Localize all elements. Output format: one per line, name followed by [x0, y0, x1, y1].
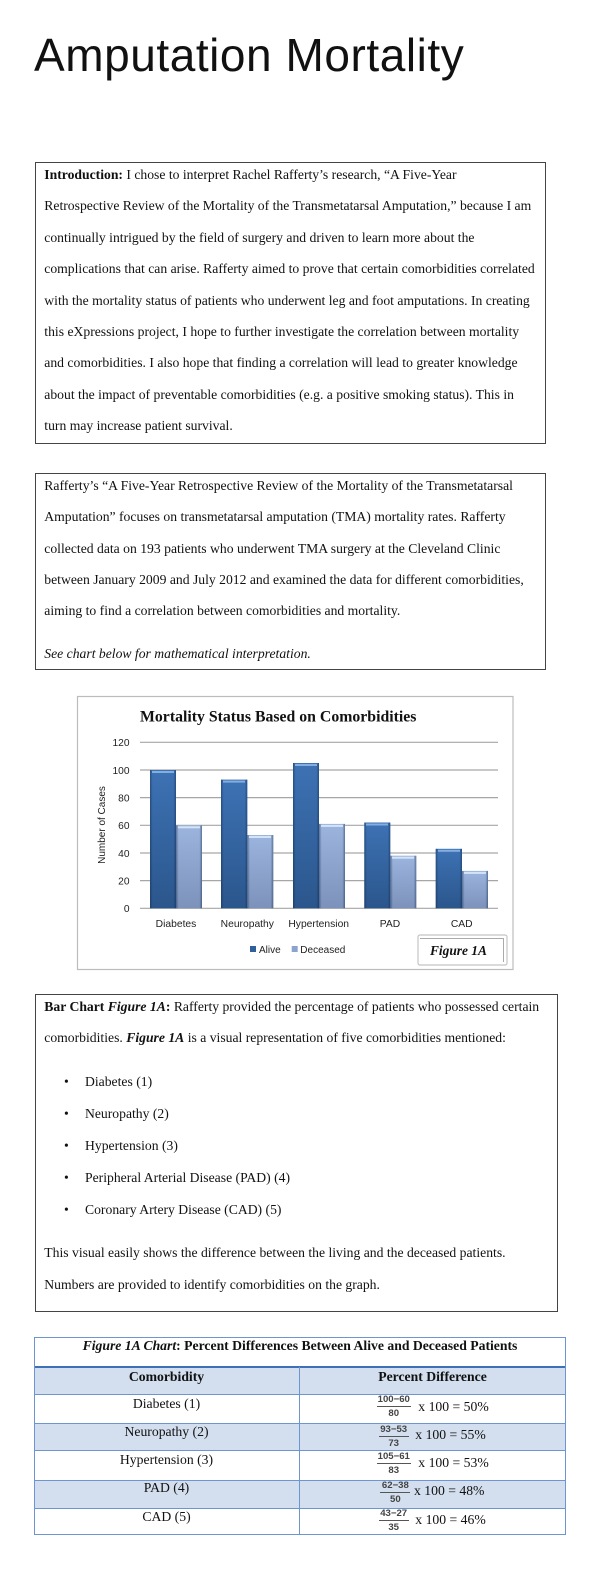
panel: study summary: between January 2009 and July 2012 and examined the data for different comorbidities,	[44, 572, 524, 587]
bar side bevels	[150, 763, 488, 908]
panel: introduction	[35, 162, 546, 444]
table: percent differences: 43−27	[380, 1508, 407, 1519]
panel: study summary	[35, 473, 546, 670]
gridlines and axis labels: 100	[112, 766, 130, 777]
gridlines and axis labels: 0	[124, 904, 130, 915]
comorbidity list: Peripheral Arterial Disease (PAD) (4)	[85, 1170, 290, 1185]
comorbidity list: •	[64, 1074, 69, 1089]
formulas: 80	[388, 1408, 399, 1418]
table: percent differences: 35	[388, 1522, 399, 1532]
panel: study summary: aiming to find a correlation between comorbidities and mortality.	[44, 603, 400, 618]
category labels: Hypertension	[288, 919, 349, 930]
y axis label: Number of Cases	[97, 786, 108, 864]
table: percent differences: 73	[388, 1438, 399, 1448]
legend: Alive	[259, 945, 281, 956]
figure label: Figure 1A	[429, 943, 487, 958]
comorbidity list: Coronary Artery Disease (CAD) (5)	[85, 1202, 281, 1217]
panel: introduction: and comorbidities. I also hope that finding a correlation will lead to greater knowledge	[44, 355, 518, 370]
category labels	[156, 919, 473, 930]
gridlines and axis labels: 80	[118, 794, 130, 804]
table: percent differences: Neuropathy (2)	[124, 1424, 208, 1439]
panel: introduction: about the impact of preventable comorbidities (e.g. a positive smoking status). This in	[44, 387, 514, 402]
category labels: PAD	[380, 919, 400, 930]
panel: introduction: turn may increase patient survival.	[44, 418, 233, 433]
comorbidity list: •	[64, 1170, 69, 1185]
gridlines and axis labels: 40	[118, 849, 130, 860]
panel: introduction: this eXpressions project, I hope to further investigate the correlation between mortality	[44, 324, 519, 339]
table: percent differences: 93−53	[380, 1424, 407, 1435]
chart title: Mortality Status Based on Comorbidities	[140, 709, 416, 726]
panel: bar chart explanation: comorbidities. Figure 1A is a visual representation of five comorbidities mentioned:	[44, 1030, 506, 1045]
comorbidity list: Neuropathy (2)	[85, 1106, 169, 1121]
table: percent differences: x 100 = 48%	[414, 1483, 484, 1498]
category labels: Neuropathy	[221, 919, 275, 930]
bars	[150, 763, 488, 908]
panel: study summary: See chart below for mathematical interpretation.	[44, 646, 311, 661]
table: percent differences: PAD (4)	[144, 1480, 189, 1495]
comorbidity list: •	[64, 1202, 69, 1217]
table: percent differences: x 100 = 46%	[415, 1512, 486, 1527]
figure label	[418, 935, 507, 965]
comorbidity list: Diabetes (1)	[85, 1074, 152, 1089]
comorbidity list: •	[64, 1106, 69, 1121]
panel: introduction: continually intrigued by the field of surgery and driven to learn more about the	[44, 230, 474, 245]
panel: introduction: Introduction: I chose to interpret Rachel Rafferty’s research, “A Five-Year	[44, 167, 457, 182]
table: percent differences	[34, 1337, 566, 1535]
table: percent differences: x 100 = 53%	[418, 1455, 489, 1470]
formulas: 100−60	[378, 1394, 410, 1405]
table: percent differences: 105−61	[378, 1451, 410, 1462]
panel: introduction: with the mortality status of patients who underwent leg and foot amputations. In creating	[44, 293, 530, 308]
table: percent differences: CAD (5)	[142, 1509, 191, 1524]
legend	[250, 945, 345, 956]
panel: introduction: Retrospective Review of the Mortality of the Transmetatarsal Amputation,” because I am	[44, 198, 531, 213]
gridlines and axis labels	[112, 738, 498, 915]
gridlines and axis labels: 20	[118, 876, 130, 888]
category labels: Diabetes	[156, 919, 196, 930]
comorbidity list: Hypertension (3)	[85, 1138, 178, 1153]
table: percent differences: 50	[390, 1494, 401, 1504]
gridlines and axis labels: 60	[118, 821, 130, 832]
bar highlights	[152, 764, 460, 852]
panel: introduction: complications that can arise. Rafferty aimed to prove that certain comorbidities correlated	[44, 261, 535, 276]
title: Amputation Mortality	[34, 29, 464, 81]
formulas	[377, 1394, 411, 1418]
table title: Figure 1A Chart: Percent Differences Between Alive and Deceased Patients	[83, 1338, 517, 1353]
comorbidity list	[64, 1074, 290, 1217]
table: percent differences: Diabetes (1)	[133, 1396, 200, 1411]
table shaded rows	[34, 1367, 566, 1394]
table: percent differences: x 100 = 50%	[418, 1399, 489, 1414]
table: percent differences: 83	[388, 1464, 399, 1476]
panel: study summary: Rafferty’s “A Five-Year Retrospective Review of the Mortality of the Transmetatarsal	[44, 478, 513, 493]
table: percent differences: Comorbidity	[129, 1369, 204, 1384]
table rules	[34, 1337, 566, 1338]
bar chart: mortality status	[76, 696, 514, 970]
legend: Deceased	[300, 945, 345, 956]
panel: study summary: Amputation” focuses on transmetatarsal amputation (TMA) mortality rates. Rafferty	[44, 509, 506, 524]
panel: bar chart explanation: Bar Chart Figure 1A: Rafferty provided the percentage of patients who possessed certain	[44, 998, 539, 1014]
table: percent differences: x 100 = 55%	[415, 1427, 486, 1442]
gridlines and axis labels: 120	[112, 738, 130, 749]
panel: bar chart explanation	[35, 994, 558, 1312]
comorbidity list: •	[64, 1138, 69, 1153]
table: percent differences: Hypertension (3)	[120, 1452, 213, 1467]
panel: bar chart explanation: This visual easily shows the difference between the living and the deceased patients.	[44, 1245, 506, 1260]
table: percent differences: Percent Difference	[378, 1369, 487, 1384]
table: percent differences: 62−38	[382, 1480, 409, 1491]
panel: study summary: collected data on 193 patients who underwent TMA surgery at the Cleveland Clinic	[44, 541, 500, 556]
panel: bar chart explanation: Numbers are provided to identify comorbidities on the graph.	[44, 1277, 380, 1292]
category labels: CAD	[451, 919, 473, 930]
